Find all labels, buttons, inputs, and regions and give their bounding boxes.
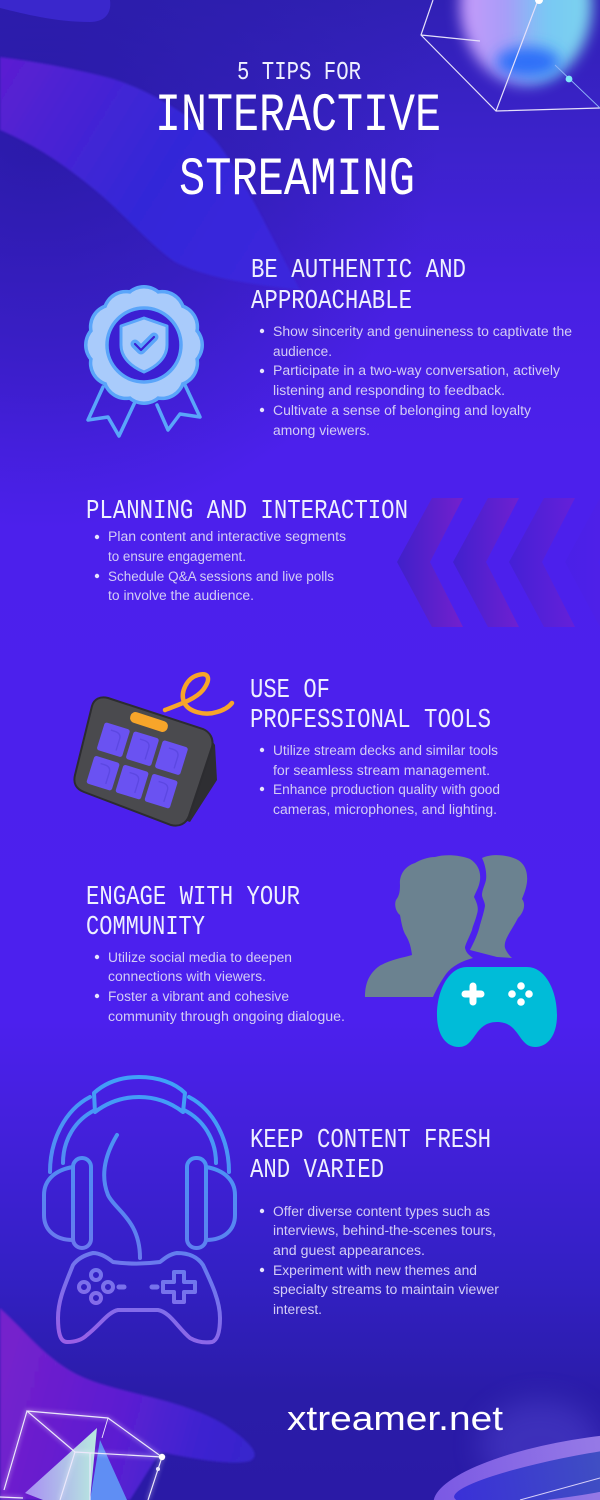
bullet list: Utilize social media to deepen [108,950,292,965]
decoration: glowing cube bottom left [0,1411,165,1500]
panel: keep content fresh and varied [44,1077,500,1342]
panel: engage with your community [86,855,557,1047]
heading: ENGAGE WITH YOUR [86,883,300,913]
bullet list: Cultivate a sense of belonging and loyalty [273,403,531,418]
bullet list: audience. [273,344,332,359]
icon: chevron arrows [397,498,600,627]
heading: COMMUNITY [86,913,205,943]
heading [250,1126,491,1186]
bullet list: Foster a vibrant and cohesive [108,989,289,1004]
website url: xtreamer.net [287,1400,504,1438]
icon: headset and controller [44,1077,235,1342]
bullet list: Participate in a two-way conversation, actively [273,363,560,378]
bullet list [95,529,346,603]
bullet list: to involve the audience. [108,588,254,603]
title: line one: INTERACTIVE [155,86,441,147]
bullet list: Experiment with new themes and [273,1263,477,1278]
bullet list: and guest appearances. [273,1243,425,1258]
bullet list: community through ongoing dialogue. [108,1009,345,1024]
bullet list: Utilize stream decks and similar tools [273,743,498,758]
title: line two: STREAMING [179,150,415,211]
heading [86,883,300,943]
decoration: glowing cube top right [421,0,600,111]
bullet list: connections with viewers. [108,969,266,984]
decoration: ring bottom right [427,1400,600,1500]
heading: KEEP CONTENT FRESH [250,1126,491,1156]
panel: planning and interaction [86,497,600,627]
bullet list: Offer diverse content types such as [273,1204,490,1219]
bullet list: Show sincerity and genuineness to captivate the [273,324,572,339]
panel: use of professional tools [74,674,500,826]
bullet list: cameras, microphones, and lighting. [273,802,497,817]
icon: community with gamepad [365,855,557,1047]
icon: award badge with shield [80,281,208,436]
bullet list: to ensure engagement. [108,549,246,564]
panel: be authentic and approachable [80,256,572,438]
bullet list: interviews, behind-the-scenes tours, [273,1223,496,1238]
heading [250,676,491,736]
bullet list: Enhance production quality with good [273,782,500,797]
bullet list [260,743,500,817]
heading: AND VARIED [250,1156,384,1186]
bullet list: interest. [273,1302,322,1317]
heading: USE OF [250,676,330,706]
bullet list: for seamless stream management. [273,763,490,778]
heading [251,256,466,317]
title: kicker: 5 TIPS FOR [237,57,361,87]
bullet list [95,950,345,1024]
heading: BE AUTHENTIC AND [251,256,466,286]
bullet list: Schedule Q&A sessions and live polls [108,569,334,584]
heading: PROFESSIONAL TOOLS [250,706,491,736]
bullet list [260,1204,500,1317]
heading: APPROACHABLE [251,287,412,317]
icon: stream deck [74,674,232,826]
bullet list: among viewers. [273,423,370,438]
bullet list [260,324,572,438]
bullet list: Plan content and interactive segments [108,529,346,544]
title [155,57,441,211]
bullet list: specialty streams to maintain viewer [273,1282,500,1297]
heading: PLANNING AND INTERACTION [86,497,408,527]
bullet list: listening and responding to feedback. [273,383,505,398]
